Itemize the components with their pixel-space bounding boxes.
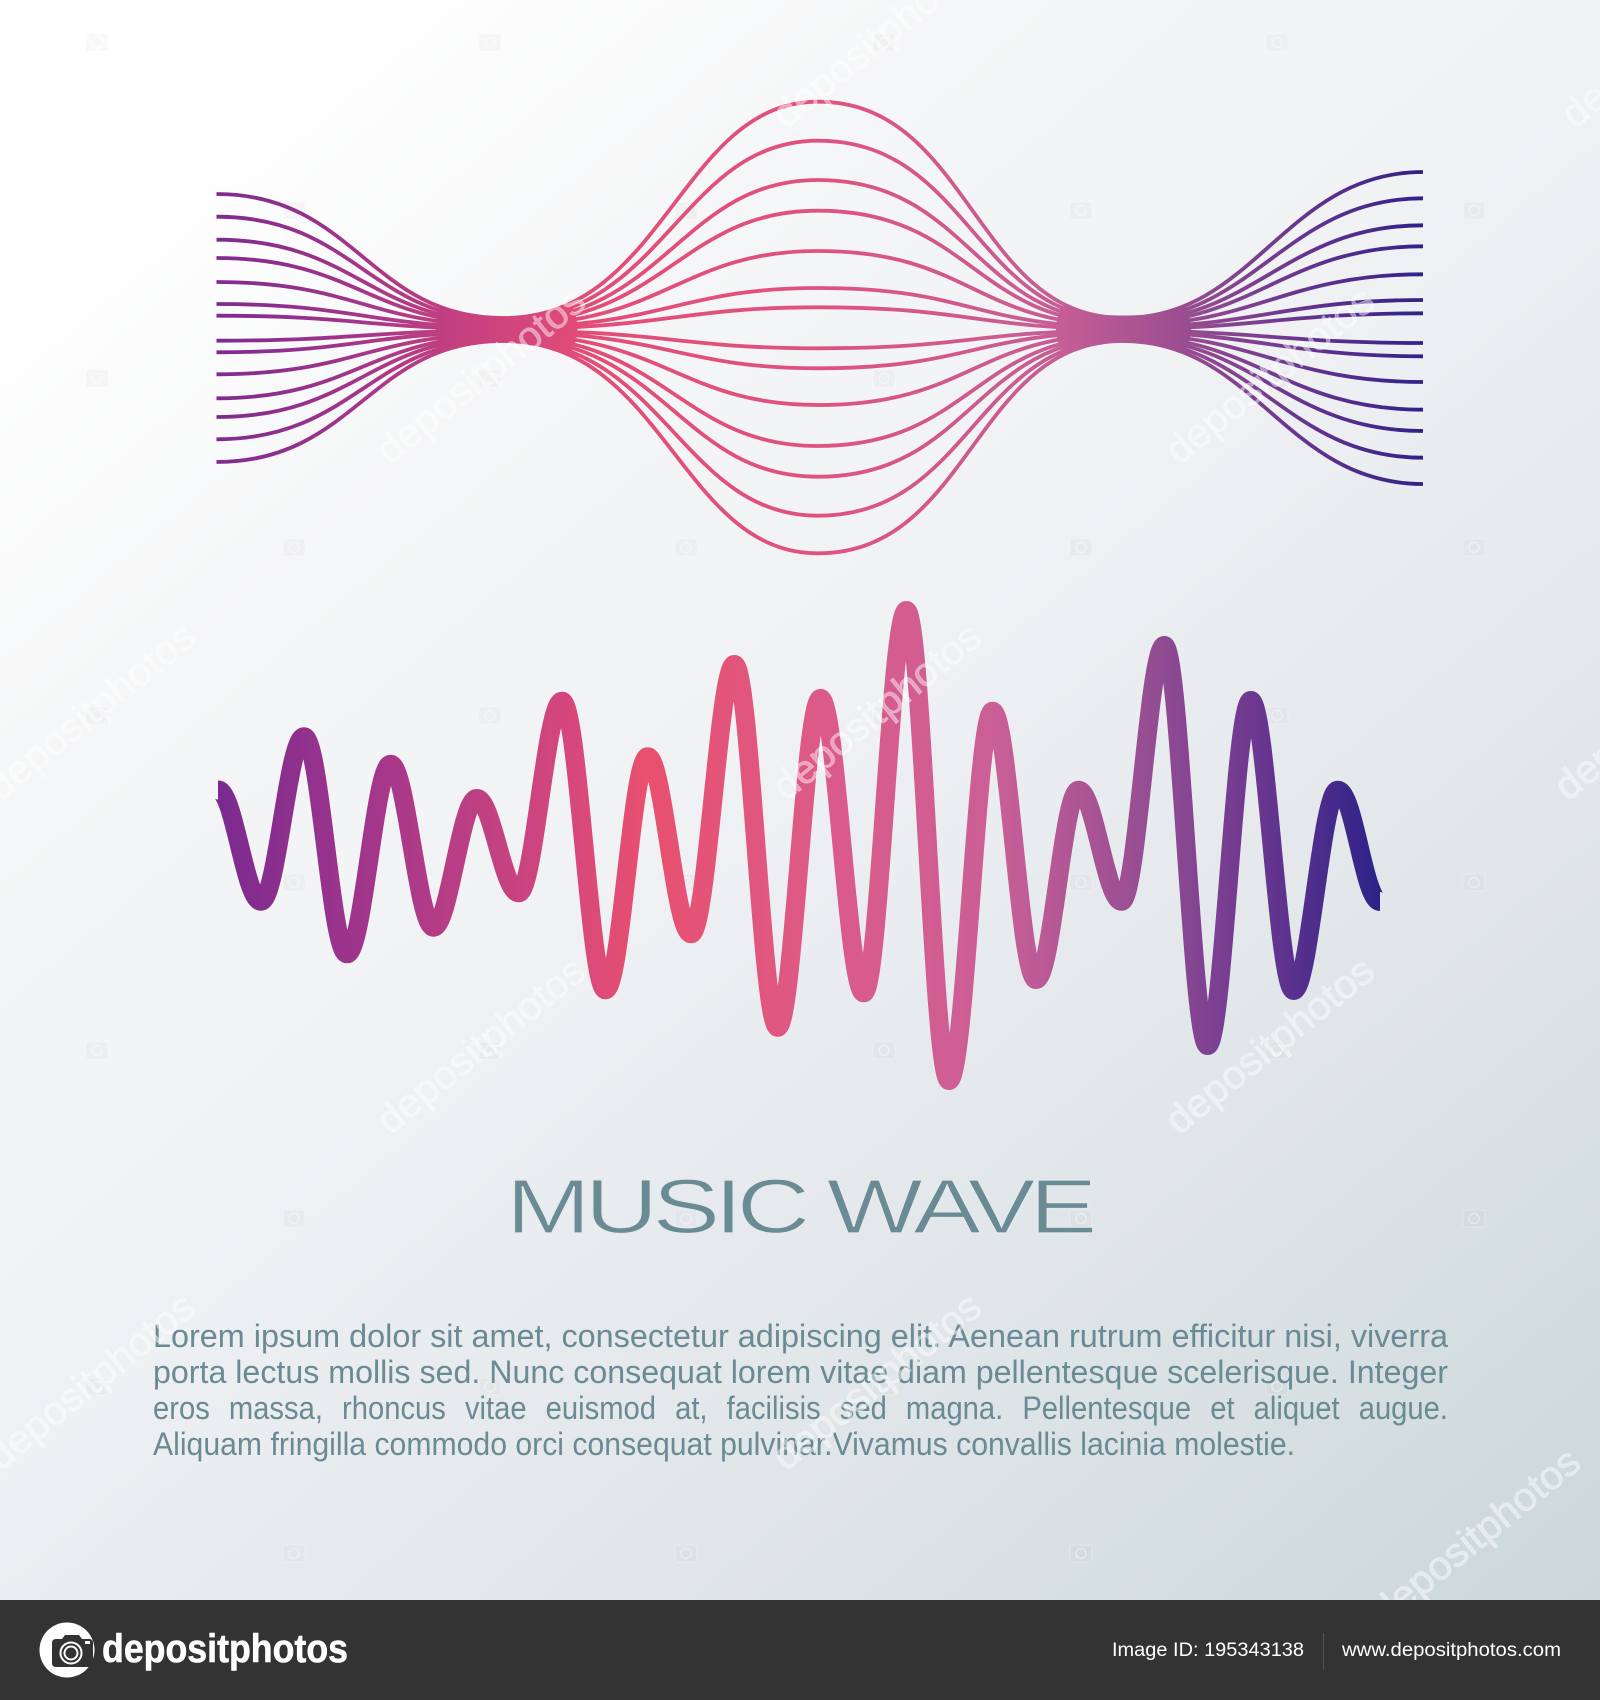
watermark camera icons: [86, 34, 1485, 1562]
watermark text: depositphotos: [1363, 1439, 1589, 1634]
watermark text: depositphotos: [368, 278, 594, 473]
watermark text: depositphotos: [764, 614, 990, 809]
footer bar: [0, 1600, 1600, 1700]
watermark text: depositphotos: [764, 1284, 990, 1479]
title: MUSIC WAVE: [506, 1164, 1097, 1250]
body text block: Lorem ipsum dolor sit amet, consectetur adipiscing elit. Aenean rutrum efficitur nisi, viverra: [153, 1318, 1448, 1354]
body text block: porta lectus mollis sed. Nunc consequat lorem vitae diam pellentesque scelerisque. Integer: [153, 1354, 1448, 1390]
watermark text: depositphotos: [1157, 278, 1383, 473]
body text block: [153, 1318, 1448, 1462]
watermark text: depositphotos: [1157, 948, 1383, 1143]
website url: www.depositphotos.com: [1341, 1640, 1561, 1661]
icon: depositphotos camera logo: [40, 1622, 94, 1678]
body text block: eros massa, rhoncus vitae euismod at, facilisis sed magna. Pellentesque et aliquet augue.: [153, 1390, 1448, 1426]
chart: thick oscillating sound wave: [218, 610, 1380, 1080]
watermark text: depositphotos: [368, 948, 594, 1143]
logo wordmark: depositphotos: [102, 1627, 348, 1671]
image id: Image ID: 195343138: [1112, 1640, 1304, 1661]
chart: fan-line sound wave: [216, 102, 1423, 553]
body text block: Aliquam fringilla commodo orci consequat pulvinar.Vivamus convallis lacinia molestie.: [153, 1426, 1295, 1462]
